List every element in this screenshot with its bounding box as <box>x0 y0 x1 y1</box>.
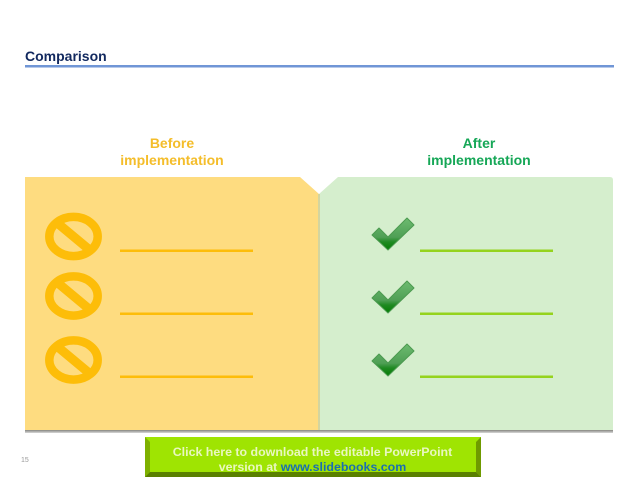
heading: before implementation: Before <box>150 135 194 151</box>
panel: after <box>318 177 613 430</box>
title: Comparison <box>25 48 107 64</box>
panel shadow <box>25 430 613 433</box>
panel: before <box>25 177 319 430</box>
title rule <box>25 65 614 68</box>
heading: after implementation <box>427 135 531 168</box>
heading: before implementation: implementation <box>120 152 224 168</box>
button text: version at www.slidebooks.com <box>219 460 406 474</box>
line 2 <box>420 312 553 315</box>
button text <box>173 445 452 474</box>
icon: check mark 2 <box>372 281 414 313</box>
line 3 <box>120 376 253 378</box>
download button <box>145 437 481 477</box>
heading: before implementation <box>120 135 224 168</box>
heading: after implementation: After <box>463 135 495 151</box>
line 3 <box>420 376 553 378</box>
line 2 <box>120 312 253 315</box>
page number: 15 <box>21 457 29 464</box>
icon: prohibition sign 1 <box>49 217 98 256</box>
heading: after implementation: implementation <box>427 152 531 168</box>
button text: Click here to download the editable PowerPoint <box>173 445 452 459</box>
icon: prohibition sign 2 <box>49 276 98 316</box>
icon: check mark 3 <box>372 344 414 376</box>
line 1 <box>420 250 553 252</box>
icon: prohibition sign 3 <box>49 340 98 380</box>
icon: check mark 1 <box>372 218 414 250</box>
line 1 <box>120 250 253 252</box>
